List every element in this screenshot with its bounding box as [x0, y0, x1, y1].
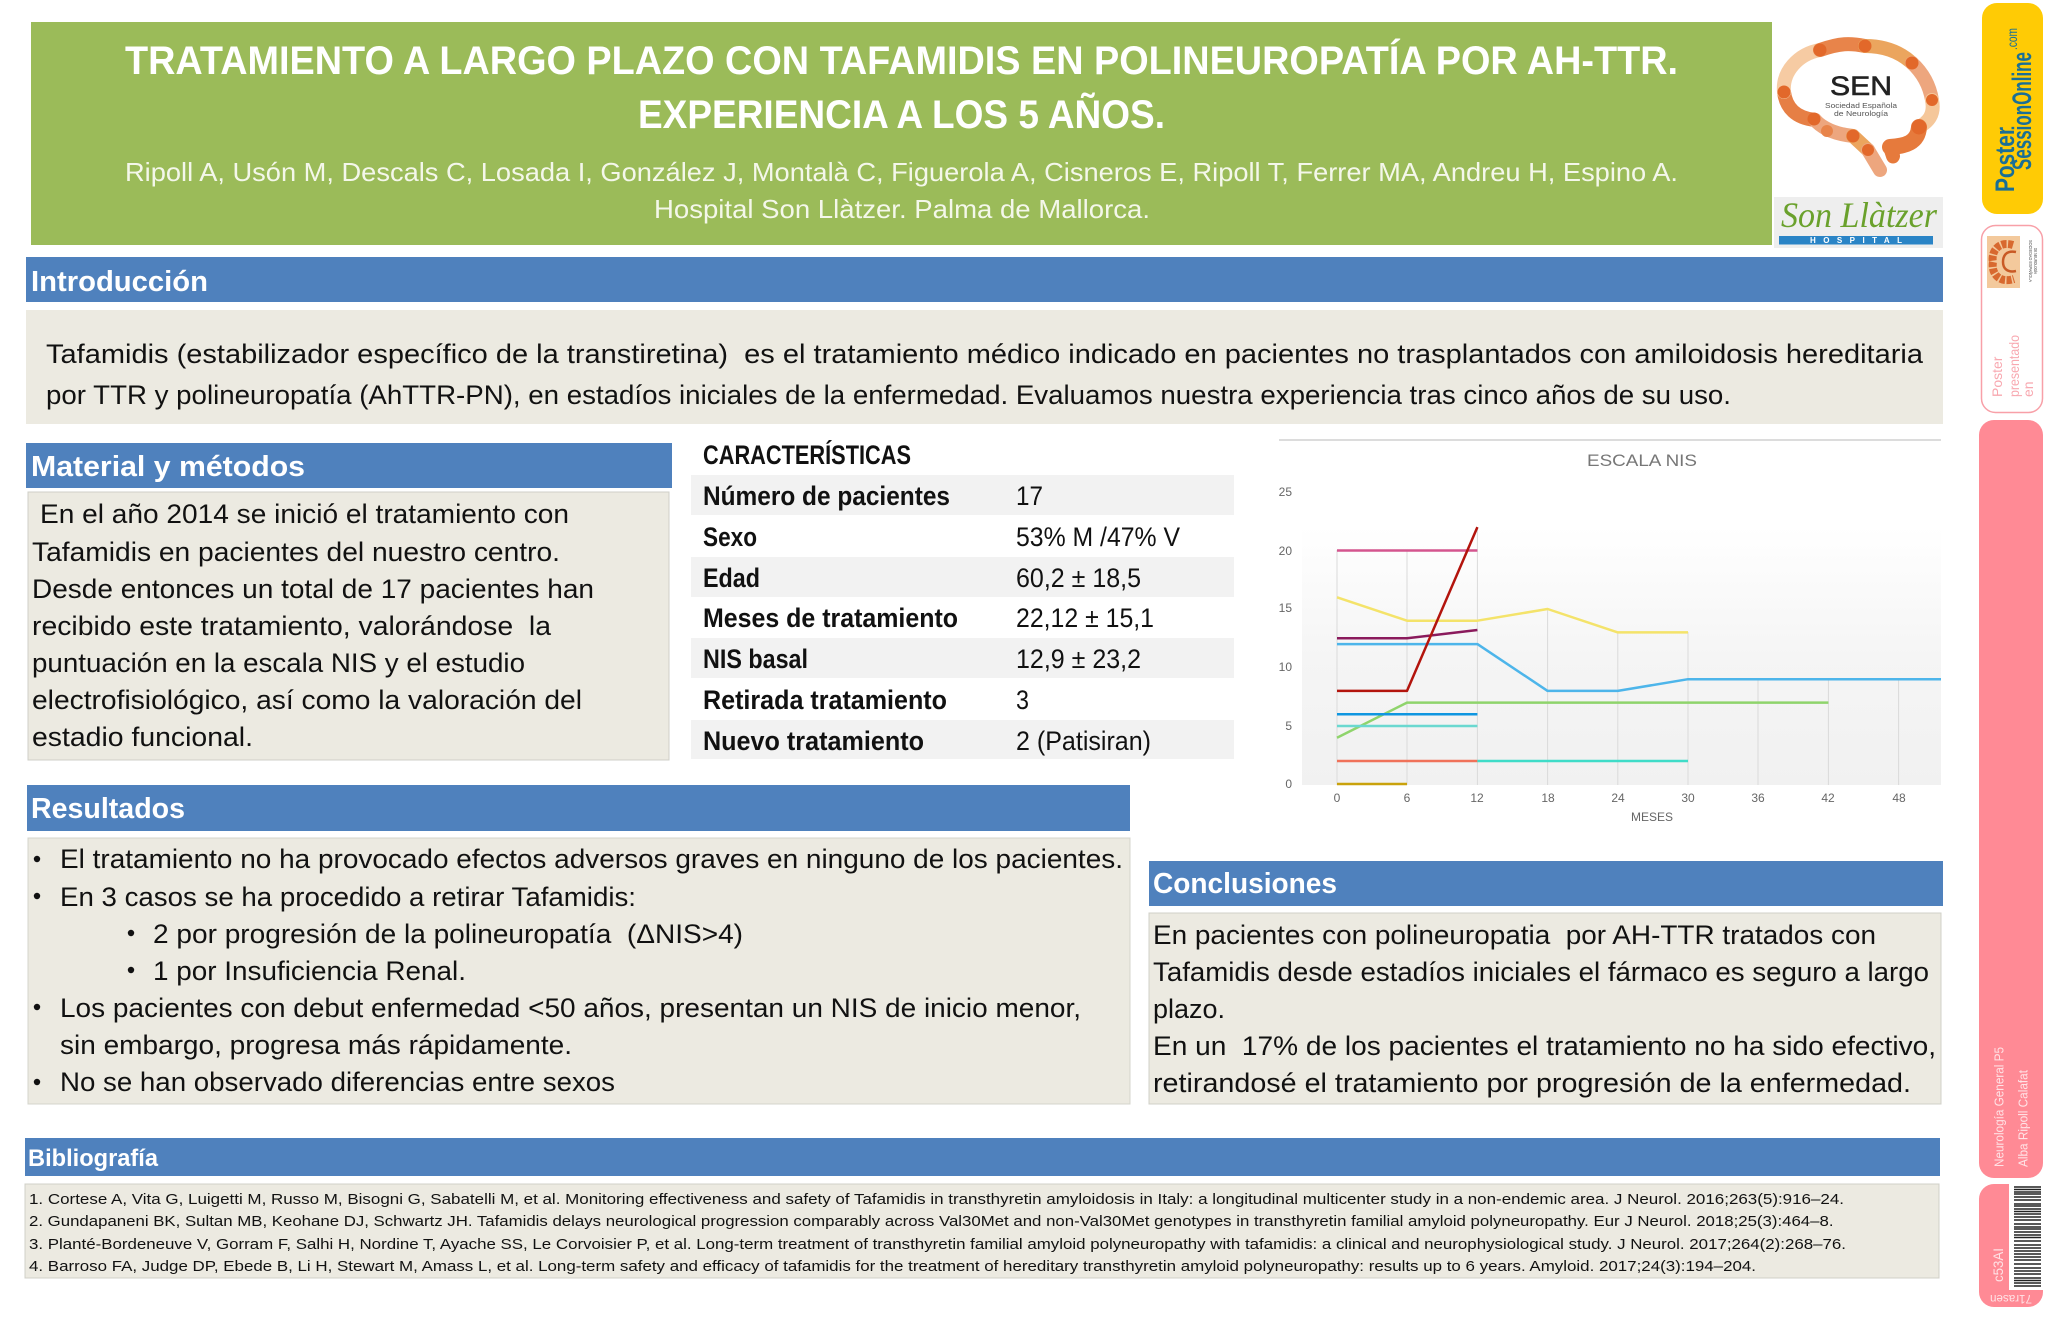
bullet list: resultados: El tratamiento no ha provocado efectos adversos graves en ninguno de los pacientes.	[60, 844, 1123, 874]
references: 1. Cortese A, Vita G, Luigetti M, Russo M, Bisogni G, Sabatelli M, et al. Monitoring effectiveness and safety of Tafamidis in transthyretin amyloidosis in Italy: a longitudinal multicenter study in a non-endemic area. J Neurol. 2016;263(5):916–24.	[29, 1191, 1844, 1208]
heading: introducción	[26, 257, 1943, 302]
authors and hospital	[125, 157, 1678, 224]
row values: 17	[1016, 481, 1043, 511]
chart title: ESCALA NIS	[1587, 451, 1697, 470]
logo text: SEN	[1825, 71, 1898, 118]
bullet list: resultados: Los pacientes con debut enfermedad <50 años, presentan un NIS de inicio menor,	[60, 993, 1081, 1023]
sidebar: code tab with barcode	[1979, 1184, 2043, 1307]
row values: 22,12 ± 15,1	[1016, 603, 1154, 633]
presented-at text: Poster	[1989, 356, 2005, 397]
presented-at text: presentado	[2006, 335, 2022, 397]
heading: bibliografía	[25, 1138, 1940, 1176]
title: EXPERIENCIA A LOS 5 AÑOS.	[638, 91, 1165, 137]
sidebar: PosterSessionOnline badge: Poster	[1990, 127, 2020, 192]
x axis labels: 24	[1611, 791, 1625, 805]
row values: 53% M /47% V	[1016, 522, 1180, 552]
panel: resultados	[27, 785, 1130, 1104]
logo: Son Llàtzer hospital: Son Llàtzer	[1781, 195, 1938, 235]
table heading: CARACTERÍSTICAS	[703, 439, 911, 470]
x axis labels: 36	[1751, 791, 1765, 805]
line chart: escala NIS	[1279, 440, 1941, 824]
row values: 60,2 ± 18,5	[1016, 563, 1141, 593]
panel: bibliografía	[25, 1138, 1940, 1278]
row values: 12,9 ± 23,2	[1016, 644, 1141, 674]
x axis labels: 12	[1470, 791, 1484, 805]
x axis labels	[1334, 791, 1906, 805]
row labels	[703, 481, 958, 756]
presented-at text	[1989, 335, 2036, 397]
text block: conclusiones	[1153, 920, 1936, 1098]
text block: conclusiones: En un 17% de los pacientes el tratamiento no ha sido efectivo,	[1153, 1031, 1936, 1061]
text block: introducción: Tafamidis (estabilizador específico de la transtiretina) es el tratamiento médico indicado en pacientes no trasplantados con amiloidosis hereditaria	[46, 339, 1924, 369]
society name: SOCIEDAD ESPAÑOLA	[2028, 240, 2034, 282]
x axis labels: 6	[1404, 791, 1411, 805]
authors and hospital: Hospital Son Llàtzer. Palma de Mallorca.	[654, 194, 1150, 224]
heading: conclusiones	[1149, 861, 1943, 906]
references: 2. Gundapaneni BK, Sultan MB, Keohane DJ, Schwartz JH. Tafamidis delays neurological progression comparably across Val30Met and non-Val30Met genotypes in transthyretin familial amyloid polyneuropathy. Eur J Neurol. 2018;25(3):464–8.	[29, 1213, 1834, 1230]
x axis labels: 42	[1821, 791, 1835, 805]
bullet list: resultados	[34, 844, 1123, 1097]
poster code: c53AI	[1990, 1248, 2006, 1282]
y axis labels	[1279, 485, 1292, 791]
title banner	[31, 22, 1772, 245]
x axis title: MESES	[1631, 810, 1673, 824]
society name: DE NEUROLOGÍA	[2033, 248, 2039, 274]
heading: resultados: Resultados	[31, 793, 185, 825]
icon: society brain logo	[1987, 236, 2020, 288]
heading: resultados	[27, 785, 1130, 831]
panel: conclusiones	[1149, 861, 1943, 1104]
row values	[1016, 481, 1180, 756]
row labels: Sexo	[703, 522, 757, 552]
references: 3. Planté-Bordeneuve V, Gorram F, Salhi H, Nordine T, Ayache SS, Le Corvoisier P, et al. Long-term treatment of transthyretin familial amyloid polyneuropathy with tafamidis: a clinical and neurophysiological study. J Neurol. 2017;264(2):268–76.	[29, 1236, 1846, 1253]
y axis labels: 10	[1279, 660, 1292, 674]
society name	[2028, 240, 2039, 282]
heading: conclusiones: Conclusiones	[1153, 868, 1337, 900]
text block: material y métodos: electrofisiológico, así como la valoración del	[32, 685, 582, 715]
presented-at text: en	[2020, 381, 2036, 397]
text block: introducción	[46, 339, 1924, 410]
x axis labels: 0	[1334, 791, 1341, 805]
x axis labels: 18	[1541, 791, 1555, 805]
title	[125, 38, 1678, 137]
bullet list: resultados: 1 por Insuficiencia Renal.	[153, 956, 466, 986]
text block: material y métodos: En el año 2014 se inició el tratamiento con	[40, 499, 569, 529]
authors and hospital: Ripoll A, Usón M, Descals C, Losada I, González J, Montalà C, Figuerola A, Cisneros E, Ripoll T, Ferrer MA, Andreu H, Espino A.	[125, 157, 1678, 187]
row values: 2 (Patisiran)	[1016, 726, 1151, 756]
row labels: Edad	[703, 563, 760, 593]
y axis labels: 15	[1279, 601, 1292, 615]
logo text: SEN: SEN	[1830, 71, 1892, 101]
row labels: Retirada tratamiento	[703, 685, 947, 715]
sidebar: PosterSessionOnline badge: .com	[2004, 28, 2020, 50]
text block: material y métodos: recibido este tratamiento, valorándose la	[32, 611, 552, 641]
row labels: Número de pacientes	[703, 481, 950, 511]
text block: conclusiones: plazo.	[1153, 994, 1225, 1024]
references: 4. Barroso FA, Judge DP, Ebede B, Li H, Stewart M, Amass L, et al. Long-term safety and efficacy of tafamidis for the treatment of hereditary transthyretin amyloid polyneuropathy: results up to 6 years. Amyloid. 2017;24(3):194–204.	[29, 1258, 1756, 1275]
row labels: Meses de tratamiento	[703, 603, 958, 633]
heading: introducción: Introducción	[31, 266, 208, 298]
sidebar: presented-at card	[1982, 226, 2042, 412]
bullet list: resultados: No se han observado diferencias entre sexos	[60, 1067, 615, 1097]
panel: material y métodos	[26, 443, 672, 760]
y axis labels: 0	[1285, 777, 1292, 791]
row labels: Nuevo tratamiento	[703, 726, 924, 756]
sidebar: session and author tab: Alba Ripoll Calafat	[2016, 1070, 2030, 1167]
barcode	[2014, 1187, 2041, 1286]
data series	[1337, 527, 1941, 784]
text block: material y métodos: Tafamidis en pacientes del nuestro centro.	[32, 537, 560, 567]
logo text: SEN: de Neurología	[1834, 109, 1889, 118]
table: características	[691, 439, 1234, 759]
y axis labels: 20	[1279, 544, 1292, 558]
logo: SEN brain	[1778, 40, 1938, 170]
site label: 71rasen	[1990, 1292, 2032, 1306]
heading: bibliografía: Bibliografía	[28, 1145, 159, 1172]
heading: material y métodos: Material y métodos	[31, 451, 305, 483]
text block: material y métodos: Desde entonces un total de 17 pacientes han	[32, 574, 594, 604]
y axis labels: 25	[1279, 485, 1292, 499]
bullet list: resultados: 2 por progresión de la polineuropatía (ΔNIS>4)	[153, 919, 743, 949]
title: TRATAMIENTO A LARGO PLAZO CON TAFAMIDIS EN POLINEUROPATÍA POR AH-TTR.	[125, 38, 1678, 83]
sidebar: PosterSessionOnline badge	[1982, 3, 2043, 214]
sidebar: session and author tab: Neurología General P5	[1992, 1047, 2006, 1167]
row values: 3	[1016, 685, 1029, 715]
x axis labels: 48	[1892, 791, 1906, 805]
sidebar: session and author tab	[1979, 420, 2043, 1178]
bullet list: resultados: En 3 casos se ha procedido a retirar Tafamidis:	[60, 882, 636, 912]
row labels: NIS basal	[703, 644, 808, 674]
text block: introducción: por TTR y polineuropatía (AhTTR-PN), en estadíos iniciales de la enfermedad. Evaluamos nuestra experiencia tras cinco años de su uso.	[46, 380, 1731, 410]
y axis labels: 5	[1285, 719, 1292, 733]
text block: conclusiones: Tafamidis desde estadíos iniciales el fármaco es seguro a largo	[1153, 957, 1929, 987]
panel: introducción	[26, 257, 1943, 424]
text block: material y métodos: puntuación en la escala NIS y el estudio	[32, 648, 525, 678]
bullet list: resultados: sin embargo, progresa más rápidamente.	[60, 1030, 572, 1060]
references	[29, 1191, 1846, 1275]
logo text: SEN: Sociedad Española	[1825, 101, 1898, 110]
text block: conclusiones: retirandosé el tratamiento por progresión de la enfermedad.	[1153, 1068, 1911, 1098]
logo: Son Llàtzer hospital: HOSPITAL	[1810, 236, 1902, 245]
heading: material y métodos	[26, 443, 672, 488]
x axis labels: 30	[1681, 791, 1695, 805]
text block: material y métodos: estadio funcional.	[32, 722, 253, 752]
text block: conclusiones: En pacientes con polineuropatia por AH-TTR tratados con	[1153, 920, 1876, 950]
text block: material y métodos	[32, 499, 594, 752]
